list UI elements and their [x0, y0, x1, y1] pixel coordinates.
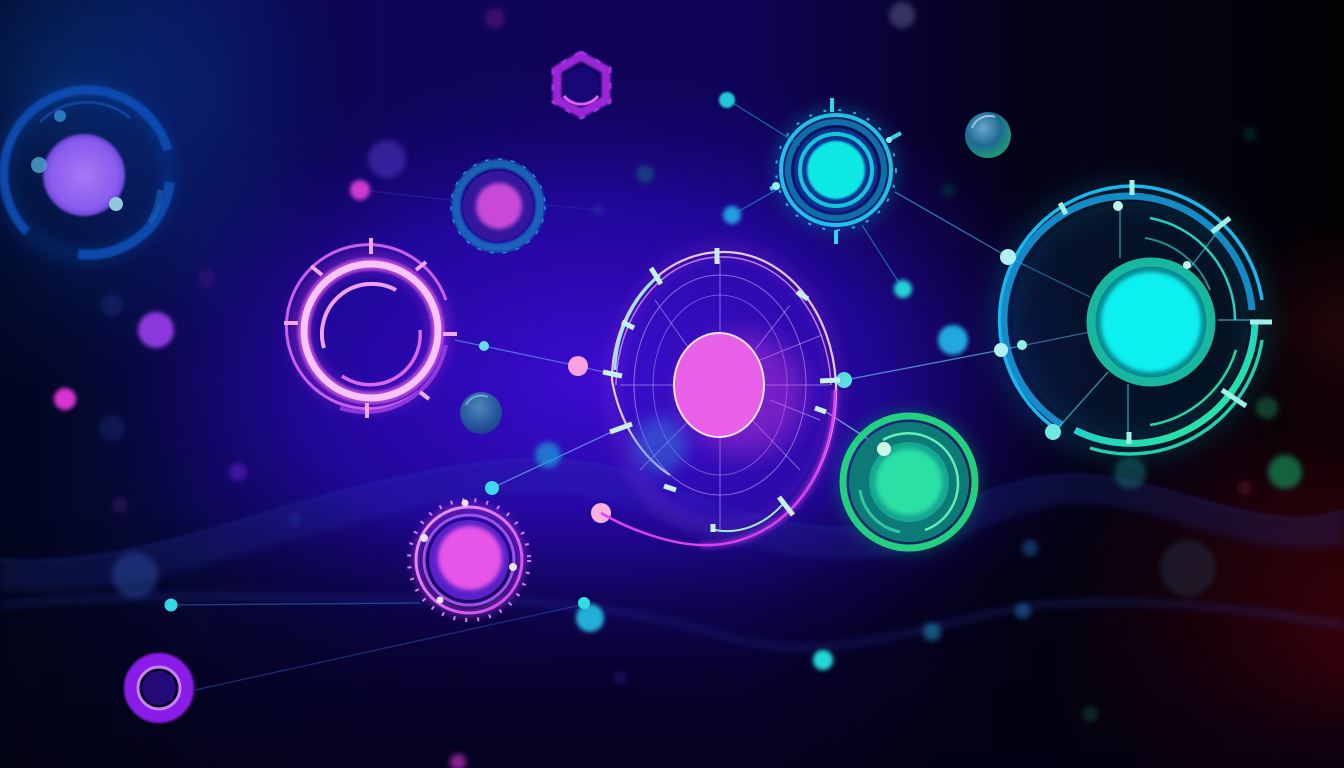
- hexagon node: [553, 52, 610, 118]
- main purple dial: [601, 248, 840, 545]
- node: green ring: [843, 416, 975, 548]
- node: blue ring with pink core: [451, 159, 545, 253]
- node: large teal dial right: [994, 180, 1272, 454]
- node: pink dial lower: [409, 500, 529, 620]
- connector lines: [171, 100, 1090, 690]
- orb: blue glass: [460, 392, 502, 434]
- node: pink ring left: [284, 238, 457, 418]
- node: blue dial top left: [4, 90, 170, 256]
- small glowing dots: [54, 92, 968, 670]
- wave bands: [0, 460, 1344, 647]
- node: violet ring bottom left: [131, 660, 187, 716]
- orb: teal glass: [965, 112, 1011, 158]
- node: cyan ring top: [770, 98, 901, 244]
